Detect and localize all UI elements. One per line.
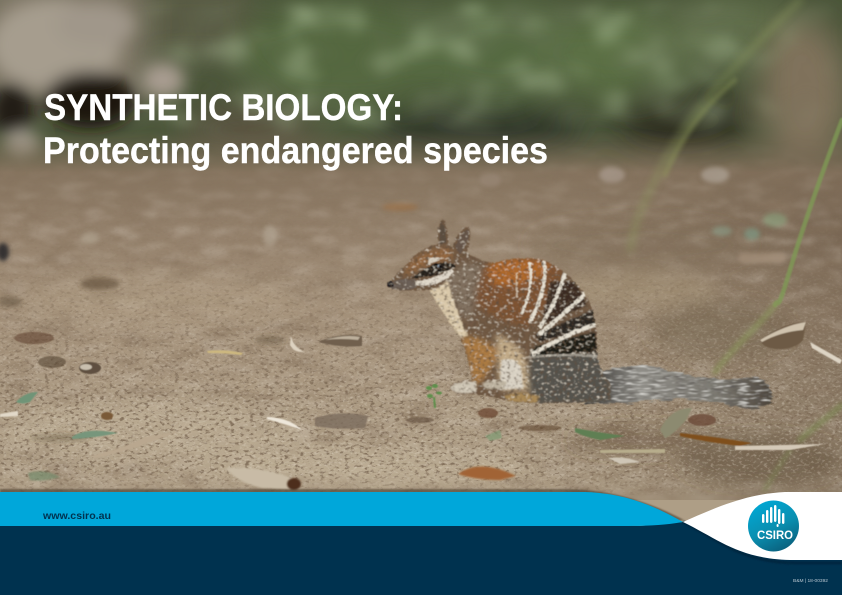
numbat body and head [383,217,617,407]
title [43,87,548,171]
seedling beside numbat [426,384,442,408]
title: Protecting endangered species [43,130,548,171]
title: SYNTHETIC BIOLOGY: [44,87,403,128]
photo shadow along footer [0,489,684,530]
ground debris: leaves, stones and twigs [0,167,842,490]
out-of-focus grass blades [630,0,842,490]
white logo panel [683,492,842,560]
footer band [0,489,842,595]
navy footer [0,520,842,595]
numbat eye stripe and face [412,263,456,278]
numbat ears [440,223,446,243]
light blue band [0,492,683,526]
footer shadow under white panel [683,522,842,563]
numbat tail [585,366,772,409]
document reference code: B&M | 18-00392 [793,578,828,583]
CSIRO logo: CSIRO [757,530,793,542]
website address: www.csiro.au [42,510,111,522]
photo background: out-of-focus bush and rocks [0,0,842,168]
numbat white stripes [517,263,597,357]
numbat [383,217,617,407]
sandy ground [0,134,842,526]
CSIRO logo [748,500,799,552]
